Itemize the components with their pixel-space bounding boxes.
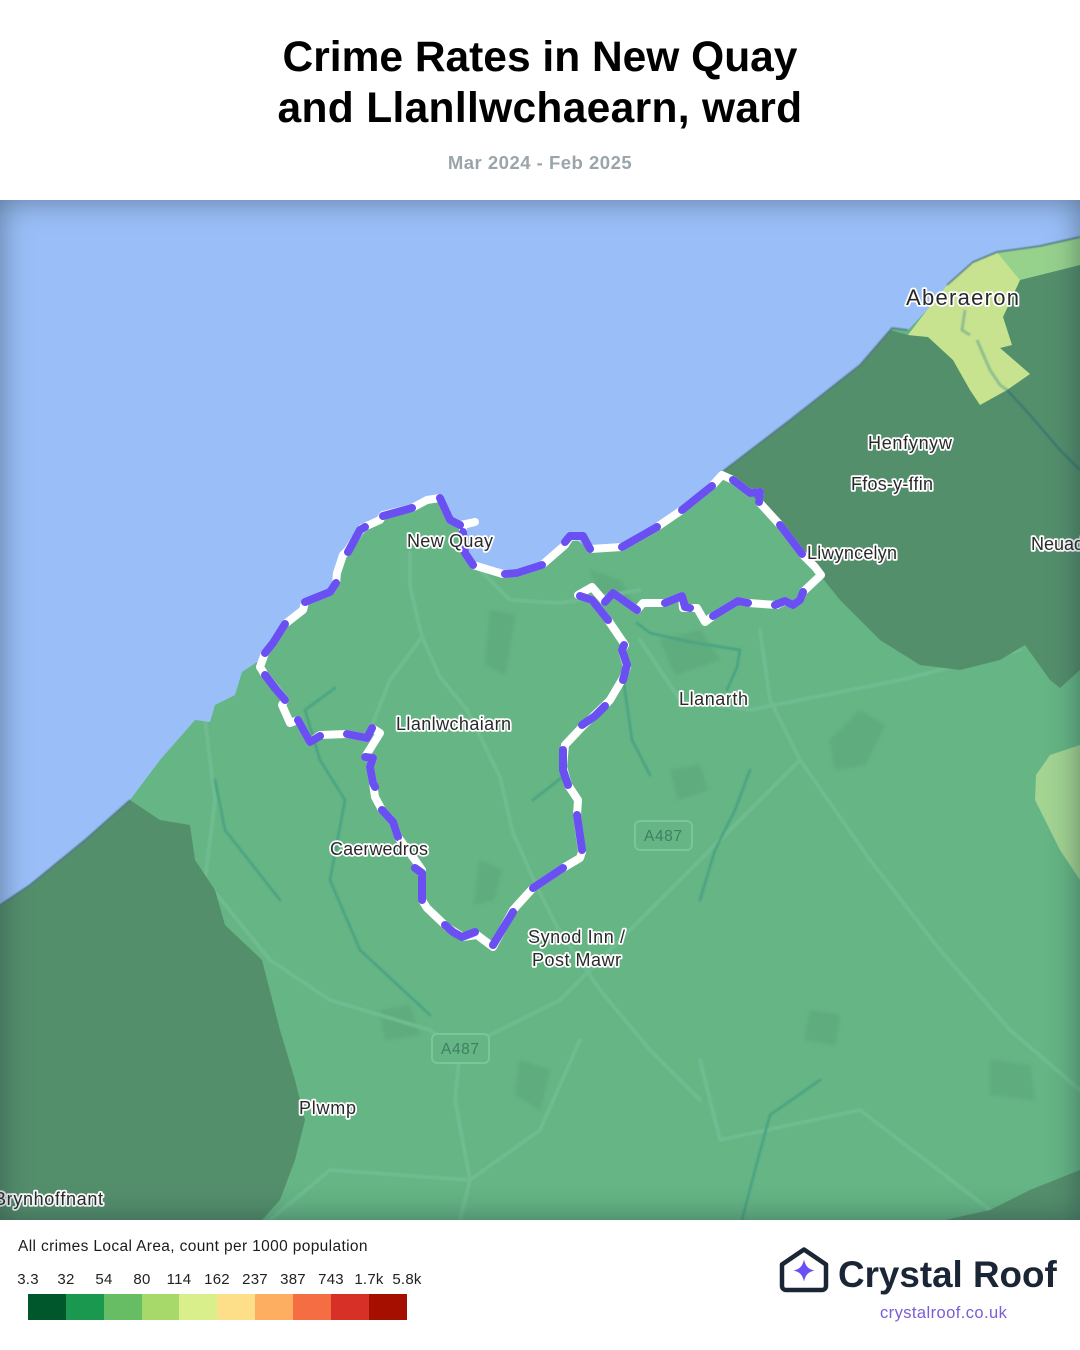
label: Henfynyw: Henfynyw [868, 433, 953, 453]
label: Post Mawr: Post Mawr [532, 950, 621, 970]
place labels [0, 285, 1080, 1209]
road shield: A487 north: A487 [644, 828, 682, 845]
title [278, 34, 802, 132]
area: south-west darker green [0, 800, 305, 1220]
label: Llanarth: Llanarth [679, 689, 748, 709]
area: north-east corner mid green [997, 237, 1080, 280]
legend tick labels: 237 [242, 1271, 268, 1288]
roads [205, 553, 1080, 1220]
area: south-east darker green [945, 1170, 1080, 1220]
label: Ffos-y-ffin: Ffos-y-ffin [851, 474, 933, 494]
ward boundary [260, 475, 821, 947]
legend tick labels: 80 [133, 1271, 151, 1288]
purple dashes [265, 480, 803, 945]
label: Plwmp: Plwmp [299, 1098, 356, 1118]
legend tick labels: 387 [280, 1271, 306, 1288]
logo [780, 1247, 1057, 1322]
Aberaeron rivers [962, 310, 1007, 390]
label: Aberaeron: Aberaeron [906, 285, 1019, 310]
road shield: A487 south: A487 [441, 1041, 479, 1058]
coastline edges against darker areas [0, 237, 1080, 905]
title: and Llanllwchaearn, ward [278, 85, 802, 132]
label: Llanlwchaiarn: Llanlwchaiarn [396, 714, 511, 734]
legend tick labels: 1.7k [354, 1271, 384, 1288]
land texture: woodland patches [380, 570, 1035, 1110]
legend [17, 1238, 422, 1320]
legend tick labels: 743 [318, 1271, 344, 1288]
legend title: All crimes Local Area, count per 1000 population [18, 1238, 368, 1255]
rivers [215, 623, 820, 1220]
title: Crime Rates in New Quay [283, 34, 797, 81]
label: Synod Inn: Synod Inn / [528, 927, 625, 947]
map edge vignette [0, 200, 1080, 1220]
area: eastern light patch [1035, 745, 1080, 880]
legend tick labels: 3.3 [17, 1271, 39, 1288]
area: Aberaeron light green [908, 252, 1030, 405]
legend tick labels: 32 [57, 1271, 75, 1288]
white boundary line [260, 475, 821, 947]
website url: crystalroof.co.uk [880, 1304, 1007, 1322]
legend tick labels [17, 1271, 422, 1288]
label: Llwyncelyn: Llwyncelyn [807, 543, 897, 563]
legend tick labels: 5.8k [392, 1271, 422, 1288]
legend colour scale [28, 1294, 407, 1320]
area: north-east darker green [722, 265, 1080, 688]
icon: house with star [780, 1247, 828, 1292]
road shield: A487 south [432, 1034, 489, 1063]
legend tick labels: 114 [167, 1271, 191, 1288]
road shield: A487 north [635, 821, 692, 850]
brand name: Crystal Roof [838, 1254, 1057, 1295]
sea [0, 200, 1080, 905]
choropleth map [0, 200, 1080, 1220]
legend tick labels: 162 [204, 1271, 230, 1288]
legend tick labels: 54 [95, 1271, 113, 1288]
label: New Quay: New Quay [407, 531, 493, 551]
date range subtitle: Mar 2024 - Feb 2025 [448, 152, 632, 173]
land base: local area green [0, 200, 1080, 1220]
label: Caerwedros: Caerwedros [330, 839, 428, 859]
